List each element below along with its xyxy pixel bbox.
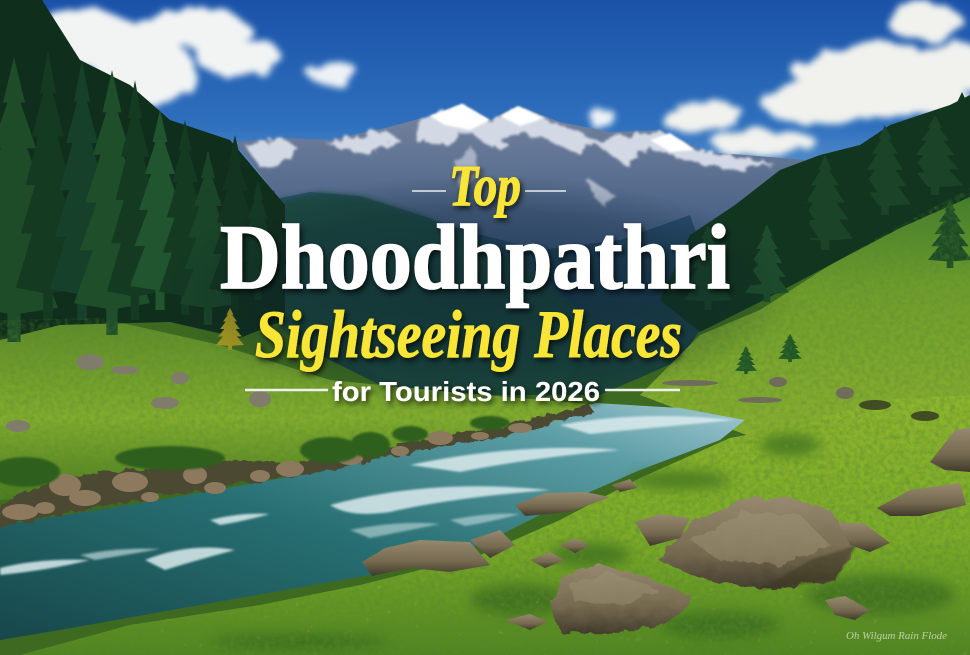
meadow bushes left bbox=[0, 416, 510, 487]
dark shade behind title bbox=[160, 175, 800, 405]
river rapids bbox=[0, 416, 735, 575]
title line: Top: Top bbox=[449, 153, 521, 218]
title line: Dhoodhpathri: Dhoodhpathri bbox=[220, 206, 730, 308]
rocks on left meadow bbox=[6, 354, 271, 432]
river bbox=[0, 403, 745, 640]
conifers right bbox=[660, 92, 970, 374]
snow patches bbox=[245, 104, 775, 207]
large foreground boulder bbox=[658, 498, 857, 590]
dark forested hill and valley bbox=[270, 192, 720, 395]
clouds: upper left bbox=[40, 8, 284, 105]
watermark: Oh Wilgum Rain Flode bbox=[846, 631, 947, 642]
sky bbox=[0, 0, 970, 230]
foreground boulder lower bbox=[550, 564, 695, 635]
bank stones bbox=[2, 423, 532, 520]
meadow back texture bbox=[0, 188, 970, 449]
river boulders bbox=[362, 479, 637, 576]
conifers left bbox=[0, 0, 290, 350]
snow-capped mountains bbox=[235, 104, 805, 250]
meadow slope right bbox=[640, 188, 970, 440]
right meadow rocks bbox=[662, 377, 939, 421]
title bbox=[220, 153, 730, 407]
clouds: upper right bbox=[658, 4, 970, 156]
title decoration lines bbox=[412, 190, 566, 192]
small foreground boulders bbox=[505, 428, 970, 630]
foreground meadow bbox=[20, 395, 970, 655]
clouds: small centre bbox=[306, 61, 615, 125]
foreground grass shadow bbox=[210, 434, 955, 650]
title line: Sightseeing Places: Sightseeing Places bbox=[255, 296, 682, 372]
foreground grass texture bbox=[132, 396, 970, 655]
subtitle decoration lines bbox=[245, 389, 680, 391]
subtitle: for Tourists in 2026 bbox=[332, 376, 600, 407]
meadow left bbox=[0, 318, 600, 500]
rocky left river bank bbox=[0, 405, 595, 527]
